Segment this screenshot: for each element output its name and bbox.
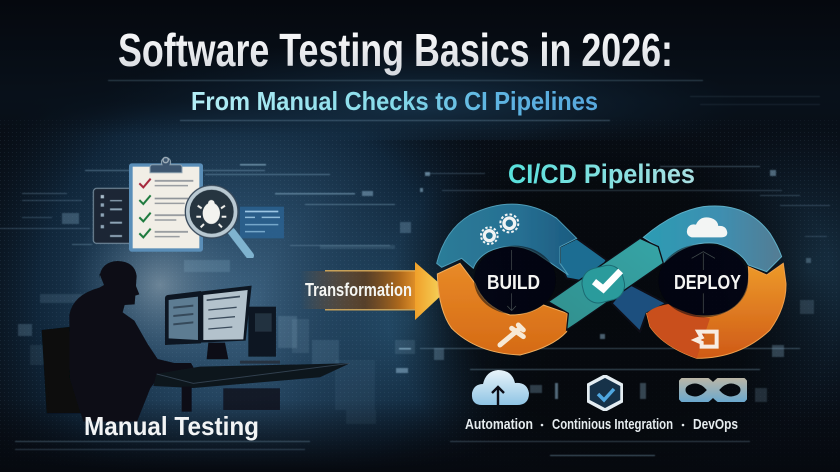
icon: clipboard with magnifier <box>93 157 284 256</box>
legend dot <box>541 424 543 426</box>
illustration: person at desk <box>42 261 350 422</box>
icon: deploy square <box>696 332 717 347</box>
segment: teal crossing with check <box>548 238 663 330</box>
segment: orange bottom left <box>437 263 567 355</box>
clipboard <box>129 157 203 252</box>
segment: orange bottom right <box>647 263 786 358</box>
segment: dark blue crossing <box>560 238 667 332</box>
background data lines <box>0 80 830 456</box>
legend item: DevOps: DevOps <box>693 417 738 433</box>
magnifier <box>185 185 250 256</box>
legend item: Automation: Automation <box>465 417 533 433</box>
faint arrows <box>507 250 715 313</box>
monitors <box>165 286 276 359</box>
label: Manual Testing: Manual Testing <box>84 411 259 441</box>
segment: blue top right <box>643 206 782 272</box>
legend: automation, integration, devops <box>465 417 738 433</box>
side panel left <box>93 188 135 243</box>
label: Transformation: Transformation <box>305 280 412 300</box>
icon: cloud <box>687 217 727 237</box>
heading: title: Software Testing Basics in 2026: <box>118 24 673 76</box>
infinity loop diagram <box>437 204 786 358</box>
person silhouette <box>42 261 194 422</box>
arrow: transformation <box>300 262 447 320</box>
hole: left <box>474 246 556 314</box>
icon: integration shield <box>588 376 622 410</box>
label: BUILD: BUILD <box>487 272 540 294</box>
icon: gears <box>481 214 518 244</box>
icon: automation cloud <box>472 370 529 405</box>
side panel right <box>240 207 284 238</box>
segment: blue top left <box>437 204 577 275</box>
heading: subtitle: From Manual Checks to CI Pipelines <box>191 86 598 116</box>
desk <box>153 361 350 412</box>
icon: devops infinity <box>680 379 746 401</box>
heading: CI/CD Pipelines: CI/CD Pipelines <box>508 159 695 189</box>
hole: right <box>658 244 748 317</box>
icon: checkmark badge <box>579 262 628 306</box>
icon: wrench <box>500 325 523 345</box>
legend item: Continuous Integration: Continious Integration <box>552 417 673 433</box>
label: DEPLOY: DEPLOY <box>674 272 742 294</box>
legend dot <box>682 424 684 426</box>
